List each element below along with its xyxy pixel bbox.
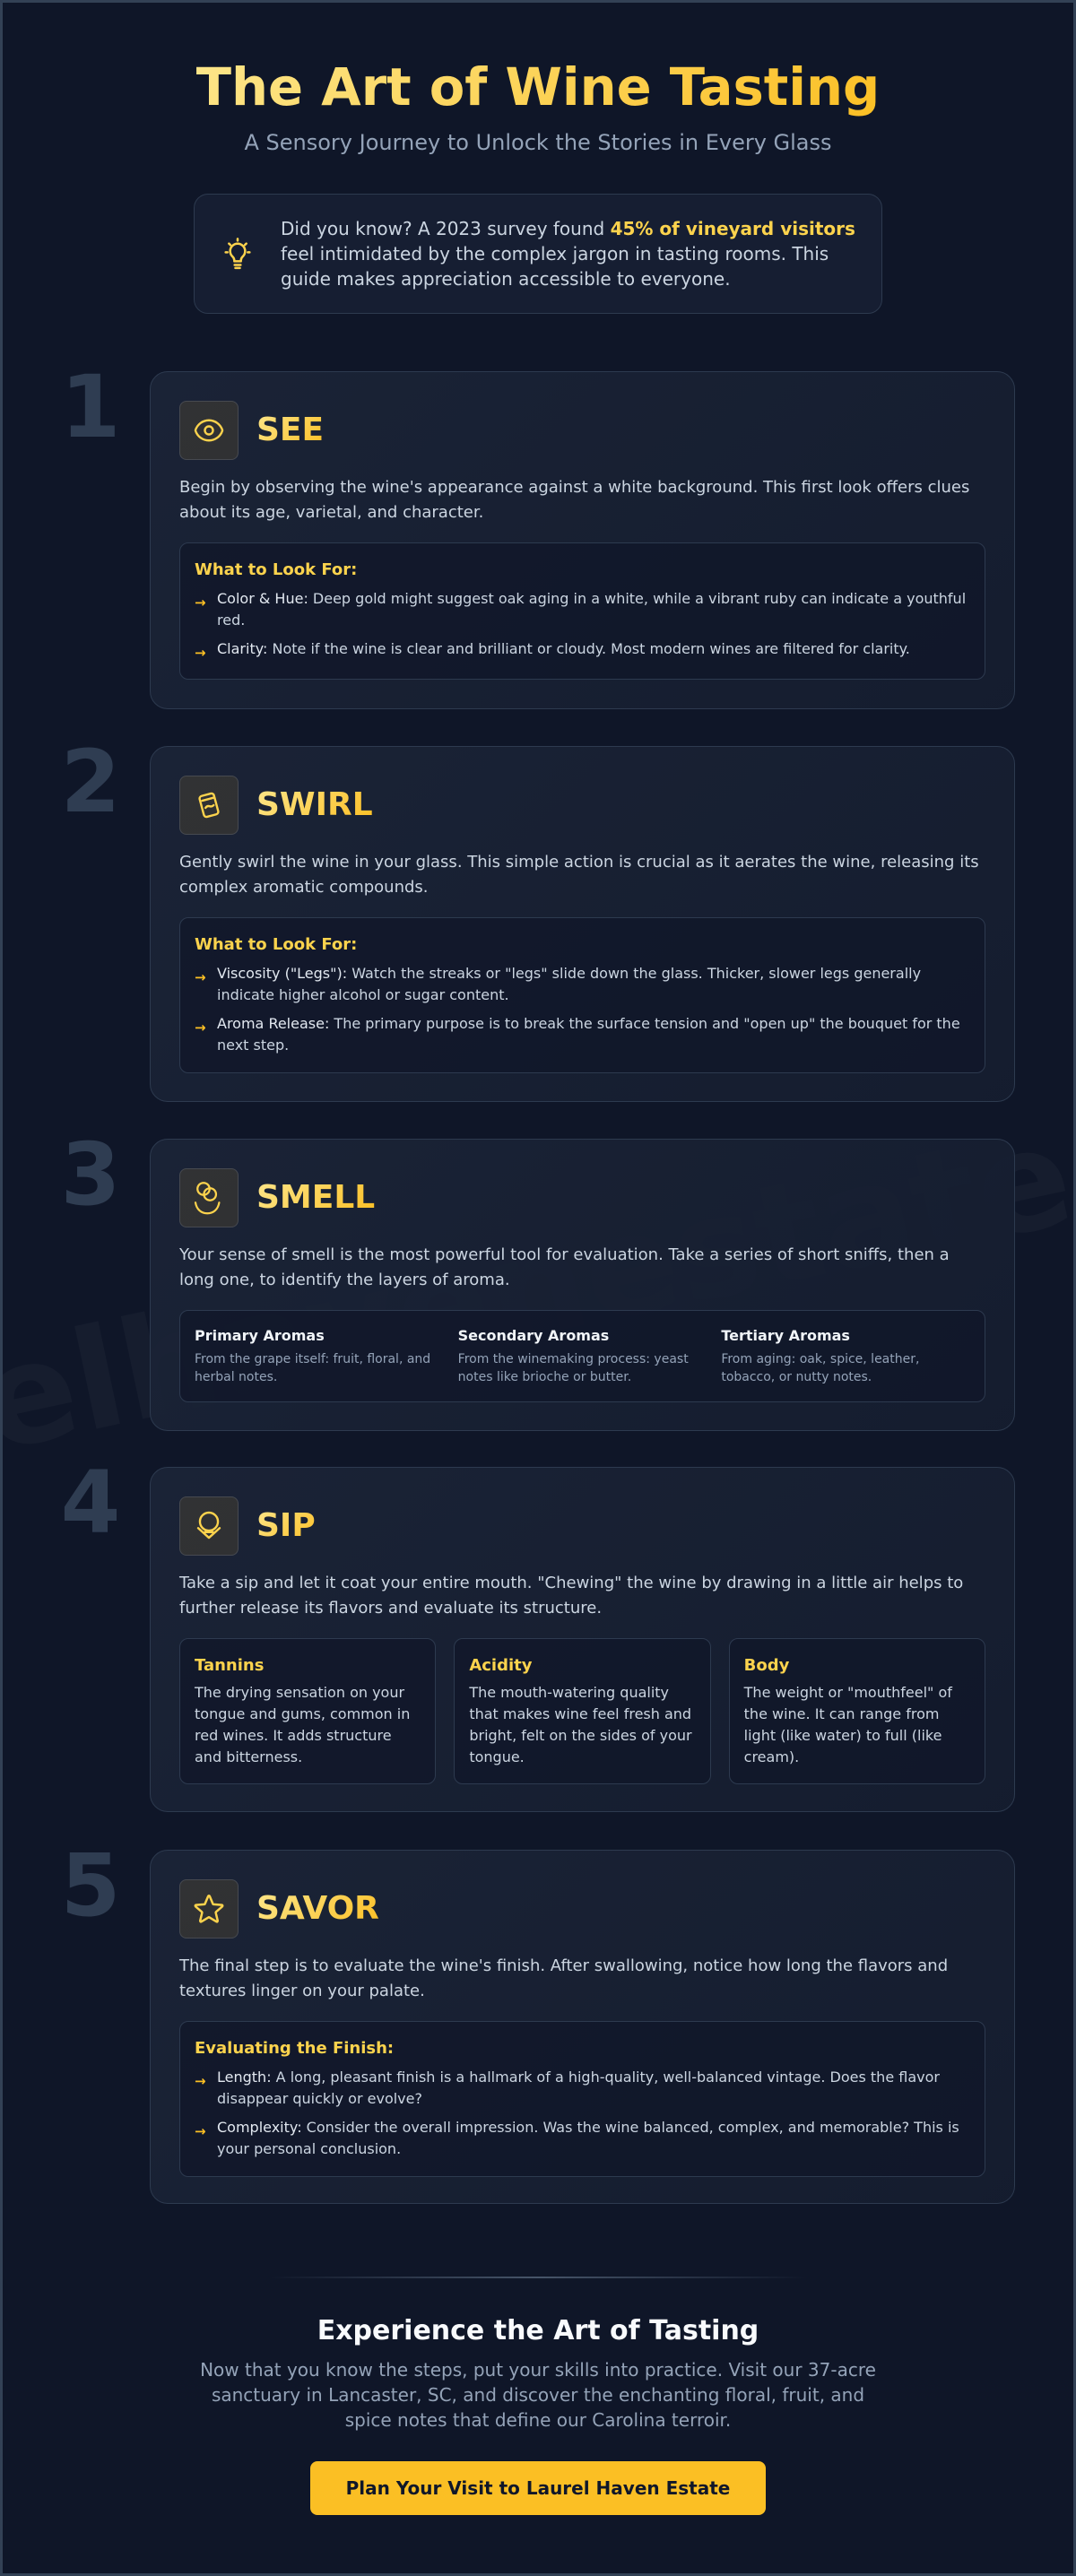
tannins: tongue and gums, common in <box>195 1705 410 1722</box>
primary aromas: Primary Aromas <box>195 1327 325 1344</box>
tannins: The drying sensation on your <box>195 1684 404 1701</box>
what to look for: Color & Hue: Deep gold might suggest oak aging in a white, while a vibrant ruby can indicate a youthful <box>217 590 966 607</box>
description: Begin by observing the wine's appearance against a white background. This first look offers clues <box>179 478 969 497</box>
body: cream). <box>744 1748 799 1765</box>
step 5: savor <box>61 1835 1015 2204</box>
button: Plan Your Visit to Laurel Haven Estate <box>346 2477 730 2499</box>
acidity: The mouth-watering quality <box>469 1684 669 1701</box>
icon: mouth <box>179 1496 239 1556</box>
footer text: Now that you know the steps, put your skills into practice. Visit our 37-acre <box>200 2359 876 2381</box>
description: Take a sip and let it coat your entire mouth. "Chewing" the wine by drawing in a little air helps to <box>179 1574 963 1592</box>
tannins: red wines. It adds structure <box>195 1727 392 1744</box>
heading: sip: SIP <box>256 1507 316 1544</box>
what to look for: Clarity: Note if the wine is clear and brilliant or cloudy. Most modern wines are filtered for clarity. <box>217 640 910 657</box>
what to look for: What to Look For: <box>195 935 357 954</box>
callout text <box>281 218 855 290</box>
icon: eye <box>179 401 239 460</box>
callout text: guide makes appreciation accessible to everyone. <box>281 268 731 290</box>
icon: lightbulb <box>224 238 251 269</box>
acidity: bright, felt on the sides of your <box>469 1727 692 1744</box>
what to look for: indicate higher alcohol or sugar content. <box>217 986 509 1003</box>
footer text: sanctuary in Lancaster, SC, and discover the enchanting floral, fruit, and <box>212 2384 864 2406</box>
footer call to action <box>200 2315 876 2431</box>
step 4: sip <box>61 1453 1015 1812</box>
icon: nose and aroma rings <box>179 1168 239 1227</box>
button <box>310 2461 766 2515</box>
what to look for: → <box>195 969 206 985</box>
title: The Art of Wine Tasting <box>196 57 880 117</box>
evaluating the finish: your personal conclusion. <box>217 2140 401 2157</box>
step 3: smell <box>61 1124 1015 1431</box>
description: textures linger on your palate. <box>179 1982 425 2000</box>
heading: savor: SAVOR <box>256 1890 379 1927</box>
evaluating the finish: Length: A long, pleasant finish is a hallmark of a high-quality, well-balanced vintage. Does the flavor <box>217 2069 940 2086</box>
evaluating the finish: Evaluating the Finish: <box>195 2039 394 2058</box>
footer text: spice notes that define our Carolina terroir. <box>345 2409 731 2431</box>
evaluating the finish: → <box>195 2073 206 2089</box>
description <box>179 1245 950 1289</box>
description: about its age, varietal, and character. <box>179 503 483 522</box>
panel: swirl <box>150 746 1015 1102</box>
acidity <box>454 1638 711 1784</box>
step 2: swirl <box>61 732 1015 1102</box>
tannins: and bitterness. <box>195 1748 302 1765</box>
subtitle: A Sensory Journey to Unlock the Stories in Every Glass <box>244 130 832 155</box>
step number 2: 2 <box>61 732 120 832</box>
what to look for: → <box>195 1019 206 1036</box>
tannins: Tannins <box>195 1656 264 1675</box>
step 1: see <box>61 357 1015 709</box>
evaluating the finish <box>179 2021 985 2177</box>
secondary aromas <box>458 1327 689 1384</box>
description: further release its flavors and evaluate its structure. <box>179 1599 602 1618</box>
heading: see: SEE <box>256 412 324 448</box>
body <box>729 1638 985 1784</box>
description: Gently swirl the wine in your glass. This simple action is crucial as it aerates the wine, releasing its <box>179 853 979 872</box>
structure cards <box>179 1638 985 1784</box>
description <box>179 478 969 522</box>
body: Body <box>744 1656 789 1675</box>
what to look for: → <box>195 645 206 661</box>
description: long one, to identify the layers of aroma. <box>179 1271 510 1289</box>
body: The weight or "mouthfeel" of <box>744 1684 952 1701</box>
what to look for <box>179 917 985 1073</box>
what to look for: Viscosity ("Legs"): Watch the streaks or "legs" slide down the glass. Thicker, slower legs generally <box>217 965 921 982</box>
evaluating the finish: → <box>195 2123 206 2139</box>
what to look for: next step. <box>217 1036 289 1054</box>
step number 3: 3 <box>61 1124 120 1225</box>
description <box>179 853 979 897</box>
description <box>179 1956 948 2000</box>
body: the wine. It can range from <box>744 1705 939 1722</box>
description: The final step is to evaluate the wine's finish. After swallowing, notice how long the flavors and <box>179 1956 948 1975</box>
description: Your sense of smell is the most powerful tool for evaluation. Take a series of short sniffs, then a <box>179 1245 950 1264</box>
step number 1: 1 <box>61 357 120 457</box>
body: light (like water) to full (like <box>744 1727 941 1744</box>
description: complex aromatic compounds. <box>179 878 429 897</box>
heading: swirl: SWIRL <box>256 786 373 823</box>
secondary aromas: Secondary Aromas <box>458 1327 609 1344</box>
callout text: Did you know? A 2023 survey found 45% of vineyard visitors <box>281 218 855 239</box>
tertiary aromas: From aging: oak, spice, leather, <box>721 1352 919 1366</box>
heading: smell: SMELL <box>256 1179 375 1216</box>
callout text: feel intimidated by the complex jargon in tasting rooms. This <box>281 243 829 265</box>
aroma types <box>179 1310 985 1402</box>
acidity: that makes wine feel fresh and <box>469 1705 691 1722</box>
footer heading: Experience the Art of Tasting <box>317 2315 759 2346</box>
primary aromas: herbal notes. <box>195 1370 277 1384</box>
what to look for: → <box>195 594 206 611</box>
primary aromas: From the grape itself: fruit, floral, and <box>195 1352 430 1366</box>
panel: smell <box>150 1139 1015 1431</box>
tertiary aromas <box>721 1327 919 1384</box>
primary aromas <box>195 1327 430 1384</box>
tertiary aromas: Tertiary Aromas <box>721 1327 850 1344</box>
panel: savor <box>150 1850 1015 2204</box>
what to look for: What to Look For: <box>195 560 357 579</box>
secondary aromas: From the winemaking process: yeast <box>458 1352 689 1366</box>
description <box>179 1574 963 1618</box>
acidity: Acidity <box>469 1656 533 1675</box>
panel: see <box>150 371 1015 709</box>
acidity: tongue. <box>469 1748 525 1765</box>
what to look for: Aroma Release: The primary purpose is to break the surface tension and "open up" the bouquet for the <box>217 1015 960 1032</box>
panel: sip <box>150 1467 1015 1812</box>
what to look for: red. <box>217 611 245 629</box>
tertiary aromas: tobacco, or nutty notes. <box>721 1370 872 1384</box>
footer text <box>200 2359 876 2431</box>
secondary aromas: notes like brioche or butter. <box>458 1370 631 1384</box>
icon: swirl <box>179 776 239 835</box>
evaluating the finish: disappear quickly or evolve? <box>217 2090 422 2107</box>
step number 5: 5 <box>61 1835 120 1936</box>
tannins <box>179 1638 436 1784</box>
step number 4: 4 <box>61 1453 120 1553</box>
evaluating the finish: Complexity: Consider the overall impression. Was the wine balanced, complex, and memorable? This is <box>217 2119 959 2136</box>
icon: star <box>179 1879 239 1939</box>
callout: did you know <box>194 194 882 314</box>
what to look for <box>179 542 985 680</box>
